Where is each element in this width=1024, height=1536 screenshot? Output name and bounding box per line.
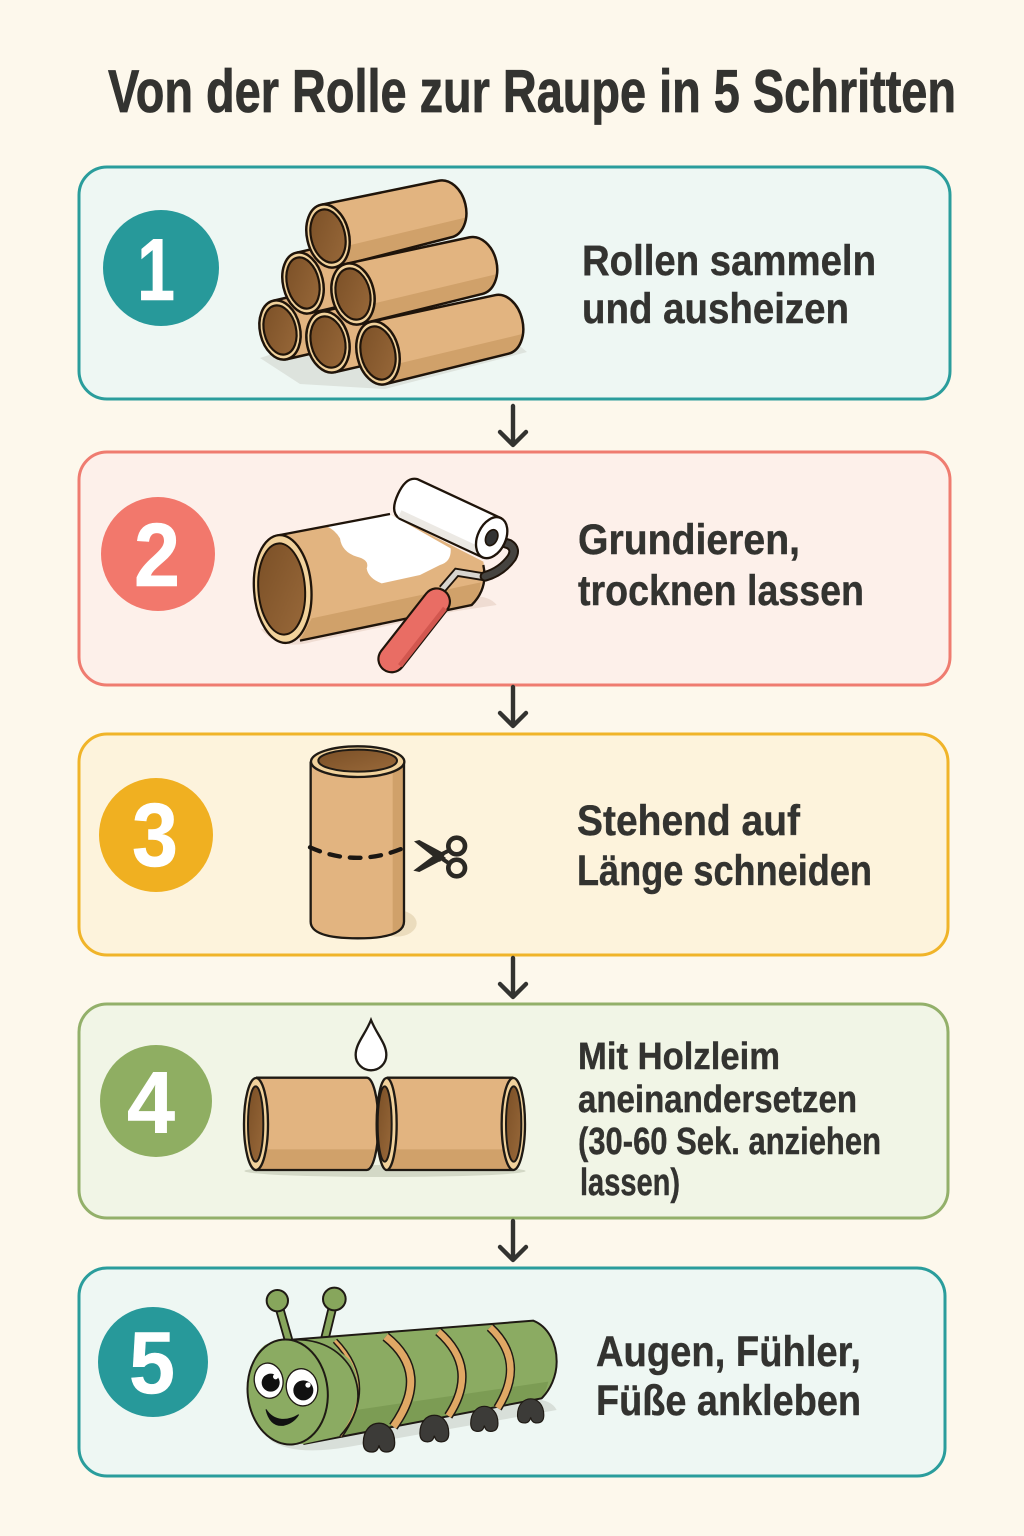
- step 3 text: [577, 797, 872, 895]
- step 3 text: Länge schneiden: [577, 847, 872, 895]
- step 5 text: [596, 1328, 861, 1425]
- step 2 text: trocknen lassen: [578, 567, 864, 615]
- step number 4: [100, 1045, 212, 1157]
- step number 1: [103, 210, 219, 326]
- step number 4: 4: [127, 1053, 175, 1152]
- arrow 3 to 4: [500, 958, 526, 997]
- step number 3: [99, 778, 213, 892]
- panel: step 4: [79, 1004, 948, 1218]
- arrow 1 to 2: [500, 406, 526, 445]
- panel: step 2: [79, 452, 950, 685]
- step number 3: 3: [132, 786, 178, 886]
- step 4 text: [578, 1036, 881, 1204]
- panel: step 5: [79, 1268, 945, 1476]
- icon: stack of paper rolls: [254, 173, 529, 389]
- arrow 2 to 3: [500, 687, 526, 726]
- step number 5: [98, 1307, 208, 1417]
- step 1 text: und ausheizen: [582, 285, 849, 333]
- step 5 text: Augen, Fühler,: [596, 1328, 861, 1376]
- step number 1: 1: [137, 220, 175, 319]
- step number 2: 2: [134, 506, 180, 606]
- step number 5: 5: [129, 1313, 175, 1412]
- step 1 text: [582, 237, 876, 333]
- step 5 text: Füße ankleben: [596, 1377, 861, 1425]
- icon: tube primed with paint roller: [250, 474, 514, 666]
- step 1 text: Rollen sammeln: [582, 237, 876, 285]
- step 4 text: Mit Holzleim: [578, 1036, 780, 1078]
- step 4 text: aneinandersetzen: [578, 1079, 857, 1121]
- icon: green caterpillar: [242, 1288, 557, 1452]
- step 3 text: Stehend auf: [577, 797, 801, 845]
- step 2 text: [578, 516, 864, 615]
- arrow 4 to 5: [500, 1221, 526, 1260]
- icon: two tubes glued together with drop: [244, 1020, 526, 1177]
- step 4 text: lassen): [580, 1162, 680, 1204]
- step number 2: [101, 497, 215, 611]
- step 2 text: Grundieren,: [578, 516, 800, 564]
- icon: standing tube with scissors: [310, 746, 465, 938]
- step 4 text: (30-60 Sek. anziehen: [578, 1121, 881, 1163]
- panel: step 1: [79, 167, 950, 399]
- icon: scissors: [413, 838, 465, 876]
- panel: step 3: [79, 734, 948, 955]
